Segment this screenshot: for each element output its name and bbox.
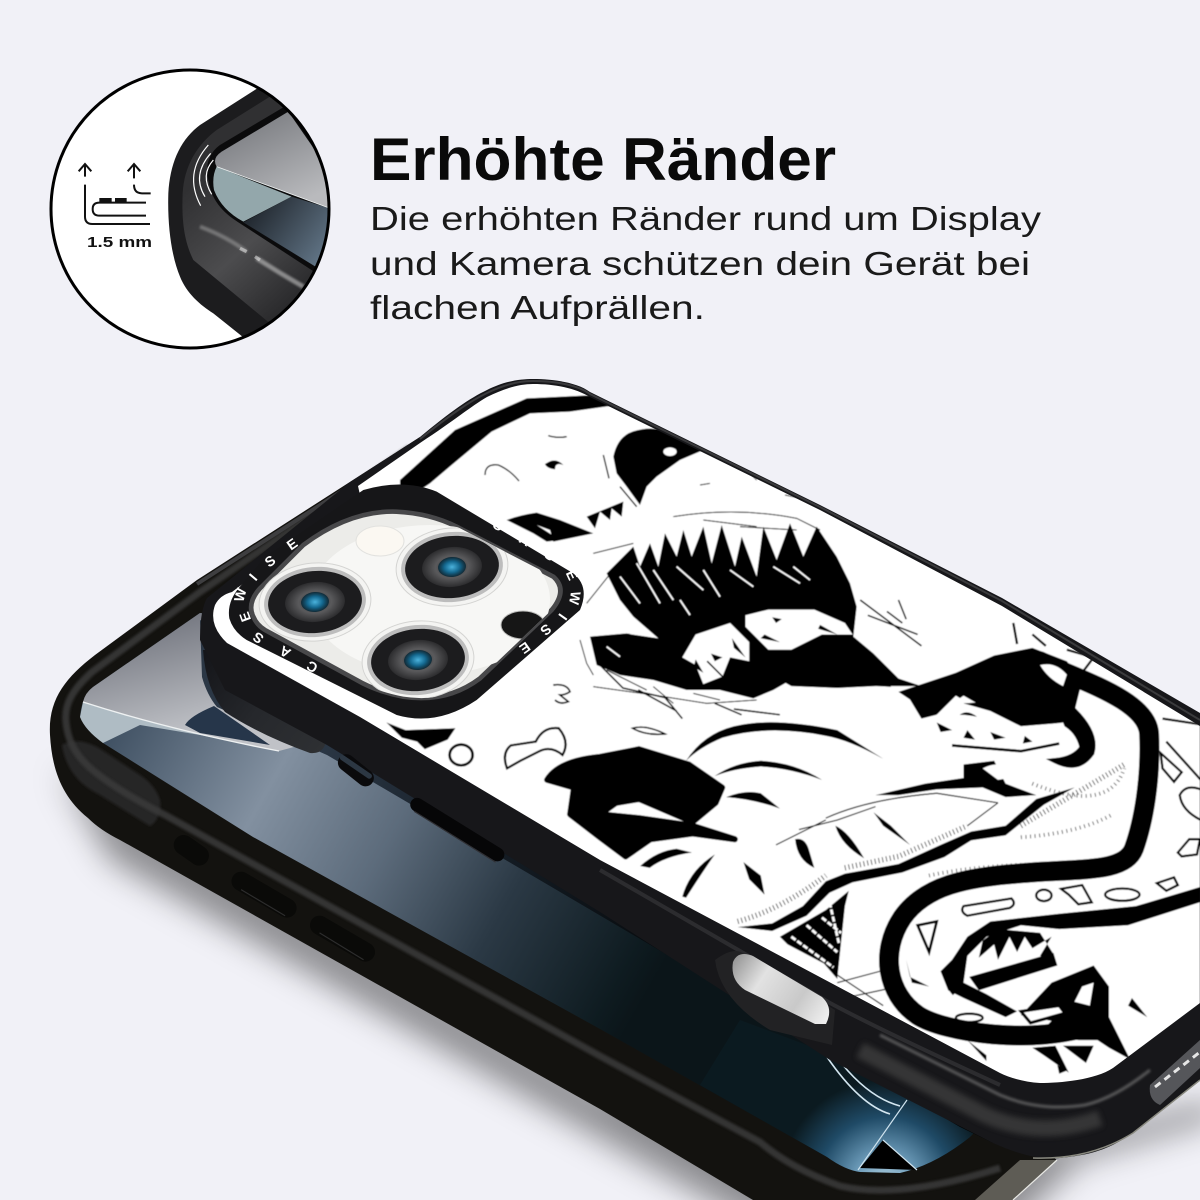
- inset photo of case corner: [168, 88, 328, 336]
- heading: Erhöhte Ränder: [370, 126, 836, 193]
- outlined spots: [956, 623, 1200, 1022]
- wallpaper blue glow: [700, 1020, 980, 1173]
- arcs: [686, 722, 883, 761]
- hatched block: [780, 891, 849, 979]
- ring lettering CASEWISE: S: [537, 621, 555, 639]
- bump glass highlight: [310, 525, 550, 675]
- carbon panel on upper phone: [203, 650, 327, 753]
- ring lettering CASEWISE: E: [284, 535, 300, 553]
- light rim along screen edge: [66, 448, 1000, 1190]
- ring lettering CASEWISE: E: [236, 610, 254, 624]
- teeth: [682, 623, 749, 684]
- camera glass: [251, 512, 560, 704]
- metal corner: [975, 1160, 1057, 1200]
- ring lettering CASEWISE: C: [490, 516, 506, 534]
- ring lettering CASEWISE: S: [250, 629, 266, 647]
- lower jaw: [941, 887, 1200, 1017]
- upper phone side wall: [200, 620, 1100, 1143]
- rounded inset: raised edge close-up: [51, 70, 340, 360]
- ring lettering CASEWISE: S: [542, 546, 558, 564]
- phone mockup: [50, 370, 1200, 1200]
- icon: raised rim diagram with arrows: [79, 164, 151, 224]
- main S stroke: [889, 661, 1149, 1036]
- hatch: [738, 765, 1124, 921]
- wallpaper dark blue shape: [185, 706, 270, 745]
- label: 1.5 mm: 1.5 mm: [87, 234, 152, 251]
- body lines: [738, 788, 1075, 931]
- wallpaper light wedge: [80, 702, 279, 751]
- camera bump: [229, 485, 584, 719]
- head hair and curl: [898, 648, 1082, 726]
- ring lettering CASEWISE: E: [563, 567, 581, 583]
- translucent grey grip: [1150, 1040, 1200, 1105]
- upper phone frame: [200, 379, 1200, 1158]
- upper phone side buttons: [342, 758, 497, 862]
- ring lettering CASEWISE: W: [231, 586, 250, 603]
- lower blob with drips: [1021, 965, 1130, 1059]
- icon: flash: [356, 526, 404, 556]
- black blob: [547, 749, 735, 856]
- ring lettering CASEWISE: A: [517, 531, 533, 549]
- lower phone case body: [50, 437, 1057, 1200]
- lens left: [258, 562, 372, 642]
- lens top: [396, 527, 508, 607]
- carbon patch on case corner: [62, 741, 160, 826]
- ring lettering CASEWISE: E: [517, 639, 533, 657]
- art: upper section traced: [400, 395, 900, 703]
- claws: [640, 849, 692, 868]
- artwork panel: [200, 370, 1200, 1100]
- frame bottom-right highlights: [880, 1035, 1150, 1107]
- lower phone side buttons: [184, 845, 365, 960]
- mouth mass: [590, 523, 900, 698]
- description text: [370, 200, 1042, 326]
- ring lettering CASEWISE: C: [304, 658, 320, 676]
- description text: Die erhöhten Ränder rund um Display: [370, 200, 1042, 237]
- lower phone screen: [80, 613, 980, 1173]
- ring lettering CASEWISE: [231, 516, 584, 676]
- charging port: [715, 951, 835, 1045]
- ring lettering CASEWISE: W: [566, 590, 584, 607]
- ring lettering CASEWISE: I: [555, 611, 571, 623]
- ring lettering CASEWISE: S: [262, 552, 278, 570]
- ring lettering CASEWISE: I: [246, 570, 260, 584]
- wallpaper grey top area: [83, 613, 330, 751]
- description text: flachen Aufprällen.: [370, 289, 705, 326]
- cast shadow: [60, 770, 1200, 1200]
- description text: und Kamera schützen dein Gerät bei: [370, 245, 1030, 282]
- frame top stroke highlight: [420, 381, 1200, 720]
- art: lower section traced: [600, 600, 1200, 1074]
- ring lettering CASEWISE: A: [277, 643, 293, 661]
- art: left doodles traced: [386, 722, 735, 856]
- icon: lidar: [501, 611, 545, 639]
- lens bottom: [362, 620, 474, 698]
